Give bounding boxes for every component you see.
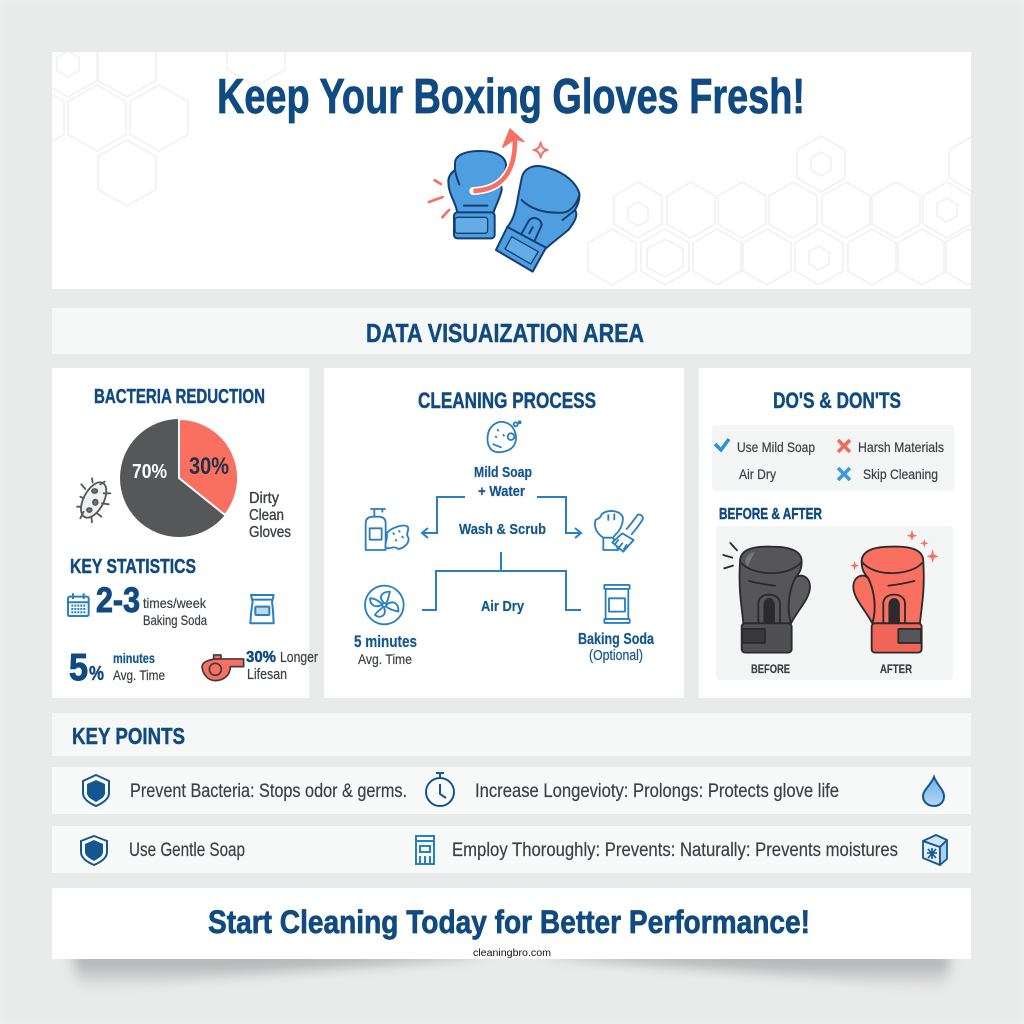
footer call to action: [52, 888, 971, 959]
text: increase longevity: Increase Longevioty: Prolongs: Protects glove life: [475, 781, 839, 802]
checklist: Air Dry: [739, 466, 776, 482]
source credit: cleaningbro.com: [473, 948, 551, 959]
stat: 2-3 times per week: [96, 581, 207, 628]
heading: bacteria reduction: BACTERIA REDUCTION: [94, 386, 265, 408]
heading: key statistics: KEY STATISTICS: [70, 556, 196, 578]
icon: clean glove: [850, 530, 939, 653]
checklist: Harsh Materials: [858, 439, 944, 455]
key point row 2: [52, 826, 971, 873]
step: wash and scrub: Wash & Scrub: [459, 521, 546, 538]
icon: baking soda box: [923, 835, 947, 865]
pie legend: Gloves: [249, 524, 291, 541]
title: Keep Your Boxing Gloves Fresh!: [217, 70, 805, 124]
step: air dry: Air Dry: [481, 598, 525, 615]
heading: before and after: BEFORE & AFTER: [719, 506, 822, 523]
panel: cleaning process: [324, 368, 684, 698]
stat: 30 percent longer lifespan: Longer: [280, 649, 318, 666]
checklist: [712, 425, 954, 491]
stat: 5 percent minutes: %: [89, 663, 104, 685]
hexagon background pattern: [52, 52, 971, 286]
icon: dirty glove: [723, 543, 810, 653]
arrow: to soap and sponge: [422, 497, 465, 538]
stat: 5 percent minutes: [69, 647, 165, 689]
stat: 2-3 times per week: times/week: [143, 595, 207, 611]
section band: key points: KEY POINTS: [72, 723, 185, 749]
header panel: [52, 52, 971, 289]
icon: fan: [365, 586, 404, 624]
stat: 30 percent longer lifespan: 30%: [246, 649, 276, 666]
label: 5 minutes average time: 5 minutes: [354, 632, 417, 651]
footer drop shadow: [72, 952, 951, 994]
step: mild soap + water: [474, 464, 532, 500]
heading: do's and don'ts: DO'S & DON'TS: [773, 388, 901, 413]
label: 5 minutes average time: Avg. Time: [358, 651, 412, 667]
label: after: AFTER: [880, 662, 912, 676]
text: use gentle soap: Use Gentle Soap: [129, 840, 245, 861]
section band: key points: [52, 713, 971, 756]
arrow: to glove and brush: [537, 497, 581, 538]
icon: glove and brush: [595, 511, 643, 552]
icon: soap bottle and sponge: [366, 509, 409, 550]
icon: whistle: [202, 655, 244, 681]
pie legend: Dirty: [249, 490, 279, 507]
text: employ thoroughly: Employ Thoroughly: Prevents: Naturally: Prevents moistures: [452, 840, 898, 861]
label: baking soda optional: [578, 631, 654, 664]
stat: 5 percent minutes: minutes: [113, 650, 155, 666]
checklist: Use Mild Soap: [737, 439, 815, 455]
section band: data visualization area: [52, 308, 971, 354]
before and after panel: [716, 526, 953, 680]
stat: 2-3 times per week: 2-3: [96, 581, 140, 620]
stat: 2-3 times per week: Baking Soda: [143, 612, 207, 628]
label: 5 minutes average time: [354, 632, 417, 667]
stat: 5 percent minutes: Avg. Time: [113, 667, 165, 683]
pie chart: [120, 419, 238, 537]
icon: baking soda bag: [250, 595, 274, 623]
icon: check mark: [715, 439, 729, 450]
stat: 30 percent longer lifespan: Lifesan: [247, 666, 287, 683]
label: before: BEFORE: [751, 662, 790, 676]
label: baking soda optional: Baking Soda: [578, 631, 654, 648]
step: mild soap + water: Mild Soap: [474, 464, 532, 481]
icon: bacteria: [76, 478, 112, 522]
icon: red cross: [838, 440, 850, 452]
icon: shield: [83, 775, 109, 806]
text: prevent bacteria: Prevent Bacteria: Stops odor & germs.: [130, 781, 407, 802]
pie legend: [249, 490, 291, 541]
step: mild soap + water: + Water: [478, 483, 525, 500]
label: baking soda optional: (Optional): [589, 647, 643, 664]
panel: bacteria reduction and key statistics: [52, 368, 318, 698]
pie chart: 70%: [132, 461, 167, 483]
key point row 1: [52, 767, 971, 814]
pie legend: Clean: [249, 507, 284, 524]
section band: data visualization area: DATA VISUAIZATION AREA: [366, 318, 644, 348]
icon: baking soda jar: [604, 585, 630, 623]
icon: jar: [416, 836, 434, 864]
panel: do's and don'ts, before and after: [699, 368, 971, 698]
icon: boxing gloves with arrow: [429, 129, 579, 272]
connector: air dry branches: [422, 552, 581, 610]
icon: calendar: [68, 593, 89, 616]
icon: water drop: [923, 777, 944, 806]
checklist: Skip Cleaning: [863, 466, 938, 482]
stat: 5 percent minutes: 5: [69, 647, 88, 689]
pie chart: 30%: [189, 453, 229, 480]
icon: stopwatch: [426, 773, 454, 806]
icon: blue cross: [838, 468, 850, 480]
icon: shield: [81, 836, 107, 865]
icon: soap: [487, 421, 521, 452]
stat: 30 percent longer lifespan: [246, 649, 318, 683]
footer call to action: Start Cleaning Today for Better Performance!: [208, 904, 810, 940]
heading: cleaning process: CLEANING PROCESS: [418, 388, 596, 413]
